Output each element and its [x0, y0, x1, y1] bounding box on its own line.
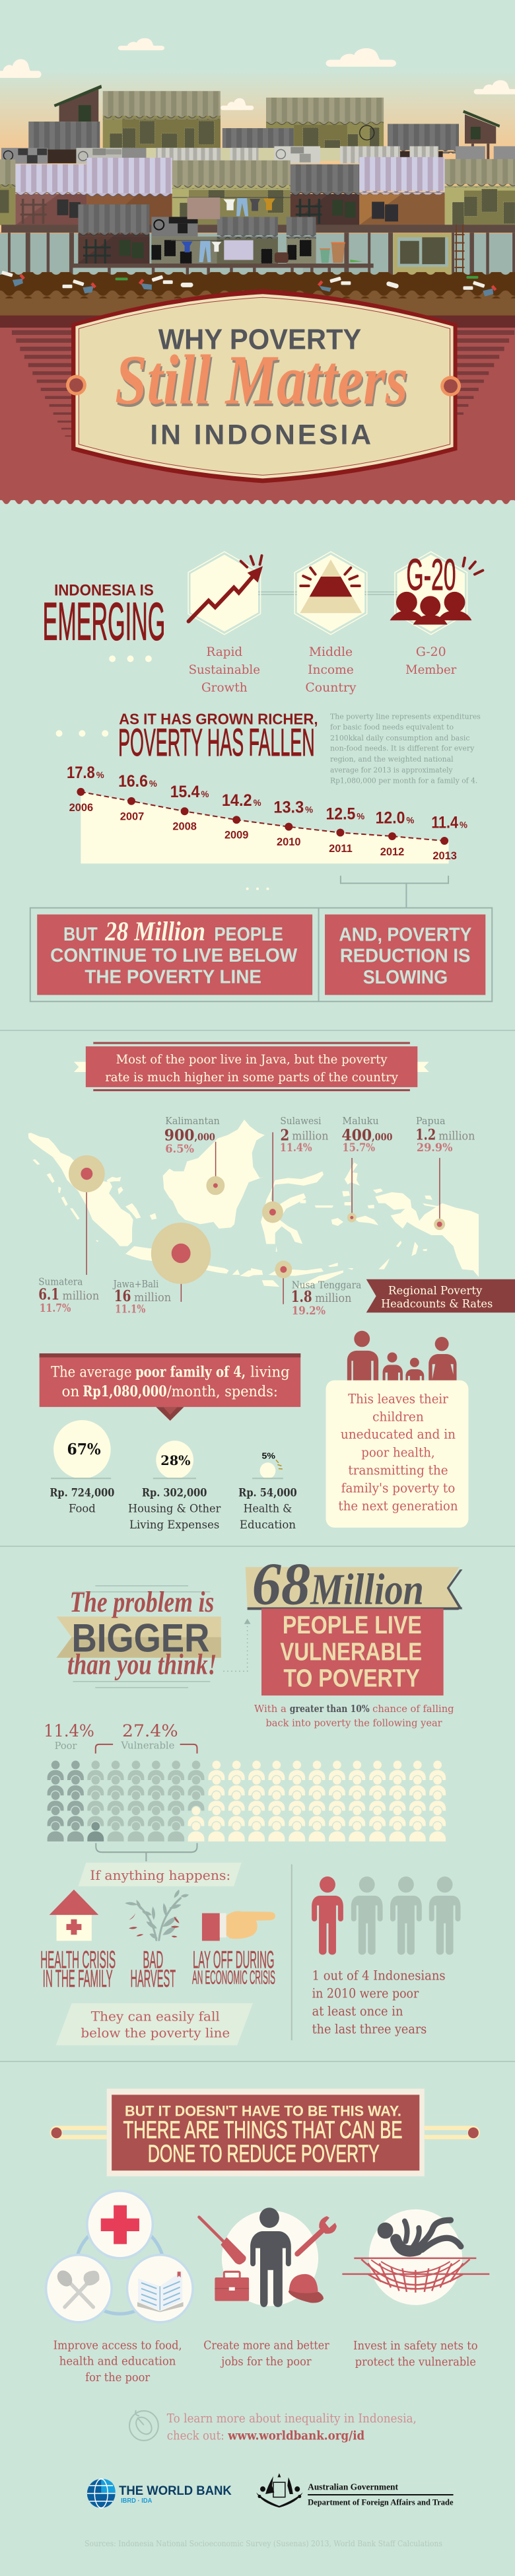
label: bad harvest: [131, 1946, 176, 1992]
legend ribbon: regional poverty headcounts and rates: [366, 1279, 515, 1312]
callout: 28 million people: [37, 914, 312, 995]
ladder: [455, 225, 464, 274]
callout: 28 million people: CONTINUE TO LIVE BELOW: [50, 945, 298, 966]
bracket over vulnerable: [96, 1744, 197, 1754]
icon: globe: [87, 2479, 116, 2508]
section: header illustration and title: [0, 0, 515, 515]
text: poverty line definition: 2100kkal daily consumption and basic: [330, 733, 469, 742]
text: poverty line definition: region, and the weighted national: [330, 754, 454, 764]
ribbon heading: rate is much higher in some parts of the country: [105, 1071, 399, 1085]
ribbon heading: [74, 1042, 429, 1091]
map marker: sulawesi: [262, 1132, 283, 1223]
callout: consequences for children: [326, 1380, 468, 1528]
label: improve access: [53, 2339, 182, 2384]
icon group: safety net: [342, 2209, 489, 2305]
map marker: maluku: [347, 1158, 357, 1223]
stat: nusa tenggara: Nusa Tenggara: [292, 1279, 361, 1291]
section: the problem is bigger: AN ECONOMIC CRISIS: [192, 1966, 275, 1988]
decorative dots: [56, 730, 108, 736]
chart percent signs: %: [254, 798, 261, 808]
callout: people live vulnerable to poverty: TO POVERTY: [283, 1664, 420, 1692]
sky background: [0, 0, 515, 329]
section: the problem is bigger: [40, 1552, 462, 2046]
chart years: [69, 802, 457, 862]
stat: kalimantan: [164, 1115, 220, 1155]
laundry on line: [171, 197, 291, 262]
stat: maluku: 15.7%: [342, 1141, 375, 1154]
chart percent signs: %: [149, 779, 157, 789]
stat: maluku: ,000: [372, 1131, 393, 1143]
text: poverty line definition: [330, 711, 481, 785]
chart values: 13.3: [273, 799, 304, 817]
ribbon: 68 million: Million: [310, 1566, 424, 1614]
logo: the world bank: [87, 2479, 232, 2508]
title banner: [66, 289, 461, 483]
label: food spending: [50, 1486, 114, 1515]
icon: computer mouse: [129, 2410, 158, 2441]
stat: kalimantan: 6.5%: [165, 1142, 194, 1155]
chart years: 2007: [120, 811, 144, 823]
label: create jobs: Create more and better: [203, 2339, 329, 2353]
label: bad harvest: BAD: [143, 1946, 163, 1974]
map of indonesia: western islands: [28, 1120, 265, 1277]
label: rapid sustainable growth: Growth: [201, 680, 248, 695]
chart values: 15.4: [170, 783, 200, 801]
label: housing spending: Living Expenses: [129, 1519, 219, 1531]
map marker: nusa tenggara: [275, 1261, 292, 1304]
text: poverty line definition: The poverty line represents expenditures: [330, 711, 481, 721]
chart values: 12.0: [376, 809, 405, 828]
stat: maluku: [341, 1115, 393, 1154]
section: indonesia is emerging and poverty trend: [30, 551, 492, 1001]
label: health crisis in the family: [40, 1946, 116, 1992]
icon: g-20 member: [390, 551, 483, 635]
callout: people live vulnerable to poverty: [261, 1608, 444, 1696]
stat: papua: million: [438, 1129, 475, 1143]
stat: nusa tenggara: 1.8: [291, 1288, 312, 1306]
label: g-20 member: [405, 645, 457, 677]
logo: the world bank: THE WORLD BANK: [119, 2484, 232, 2498]
icon: middle income pyramid: [294, 552, 367, 635]
heading: the problem is bigger than you think: [57, 1585, 221, 1688]
icon: briefcase: [215, 2272, 249, 2301]
chart years: 2011: [329, 843, 353, 855]
chart percent signs: %: [96, 770, 104, 780]
dark red top edge: [0, 316, 515, 328]
text: 1 out of 4 indonesians: the last three years: [312, 2021, 427, 2037]
stat: papua: 1.2: [415, 1126, 436, 1144]
stat: 11.4% poor: 11.4%: [44, 1721, 94, 1740]
chart percent signs: %: [201, 789, 209, 799]
map marker: kalimantan: [206, 1142, 224, 1195]
banner: there are things that can be done: THERE ARE THINGS THAT CAN BE: [123, 2116, 402, 2143]
icon: worker: [250, 2207, 291, 2307]
stat: sumatera: [38, 1275, 99, 1314]
section: the problem is bigger: IN THE FAMILY: [43, 1965, 113, 1992]
title: why poverty: WHY POVERTY: [158, 323, 361, 355]
tag: if anything happens: If anything happens:: [90, 1868, 230, 1883]
tag: they can easily fall: [56, 2003, 253, 2046]
section: the problem is bigger: HARVEST: [131, 1965, 176, 1992]
callout: reduction slowing: [325, 914, 485, 995]
bubble: housing 28%: 28%: [160, 1453, 191, 1468]
stat: sulawesi: [280, 1115, 329, 1154]
logo: australian government: Department of Foreign Affairs and Trade: [308, 2497, 454, 2507]
bracket under vulnerable: [96, 1843, 197, 1861]
stat: 27.4% vulnerable: 27.4%: [122, 1721, 178, 1740]
label: g-20 member: G-20: [416, 645, 446, 659]
label: improve access: Improve access to food,: [53, 2339, 182, 2353]
callout: consequences for children: This leaves their: [348, 1391, 449, 1407]
text: learn more: check out:: [167, 2429, 224, 2443]
callout: reduction slowing: AND, POVERTY: [339, 924, 471, 945]
icon: g-20 member: G-20: [406, 551, 456, 600]
callout: people live vulnerable to poverty: VULNERABLE: [280, 1637, 422, 1665]
stat: sumatera: million: [63, 1289, 99, 1303]
icon: family: [347, 1331, 457, 1381]
ribbon: 68 million: 68: [252, 1552, 310, 1618]
stat: jawa and bali: 11.1%: [115, 1303, 146, 1316]
label: middle income country: Middle: [309, 645, 353, 659]
callout: consequences for children: the next generation: [338, 1499, 458, 1514]
stat: 27.4% vulnerable: [120, 1721, 178, 1752]
icon: screwdriver: [199, 2217, 246, 2264]
stat: sumatera: 6.1: [38, 1285, 59, 1303]
callout: consequences for children: transmitting the: [348, 1462, 448, 1478]
legend ribbon: regional poverty headcounts and rates: Headcounts & Rates: [381, 1297, 493, 1310]
spending heading box: /month, spends:: [167, 1384, 278, 1400]
icon: house with medical cross: [50, 1890, 98, 1941]
label: lay off during an economic crisis: [192, 1946, 275, 1988]
tag: they can easily fall: below the poverty line: [81, 2025, 230, 2040]
spending heading box: living: [250, 1364, 290, 1381]
text: greater than 10% chance: With a: [254, 1703, 287, 1715]
spending heading box: poor family of 4,: [135, 1364, 246, 1381]
callout: 28 million people: BUT: [63, 924, 98, 945]
text: greater than 10% chance: greater than 10%: [290, 1703, 370, 1715]
callout: consequences for children: children: [372, 1409, 424, 1425]
lower deck water and posts: [73, 268, 331, 276]
stat: jawa and bali: million: [134, 1291, 171, 1305]
chart years: 2013: [432, 850, 457, 862]
stat: kalimantan: 900: [164, 1126, 195, 1145]
label: create jobs: jobs for the poor: [220, 2355, 312, 2369]
bubble: health and education 5%: [252, 1452, 283, 1479]
text: greater than 10% chance: back into poverty the following year: [265, 1717, 442, 1729]
connector bolts: [50, 2126, 480, 2139]
icon: spoon and fork: [46, 2255, 112, 2322]
stat: kalimantan: Kalimantan: [165, 1115, 220, 1127]
ribbon: 68 million: [246, 1552, 462, 1618]
stat: sulawesi: Sulawesi: [280, 1115, 322, 1127]
chart years: 2006: [69, 802, 93, 814]
chart values: 12.5: [326, 805, 355, 824]
heading: the problem is bigger than you think: The problem is: [69, 1585, 214, 1618]
text: 1 out of 4 indonesians: at least once in: [312, 2003, 403, 2019]
clouds: [0, 38, 515, 110]
section divider: [0, 2061, 515, 2062]
legend ribbon: regional poverty headcounts and rates: Regional Poverty: [388, 1285, 483, 1297]
stat: sulawesi: million: [292, 1129, 329, 1143]
callout: consequences for children: poor health,: [361, 1445, 435, 1460]
text: learn more: [167, 2412, 417, 2443]
text: poverty line definition: for basic food needs equivalent to: [330, 722, 454, 731]
map marker: papua: [434, 1158, 445, 1230]
icon: hard hat: [289, 2274, 324, 2303]
label: health spending: Health &: [244, 1502, 292, 1515]
callout: reduction slowing: SLOWING: [363, 967, 448, 988]
label: housing spending: Rp. 302,000: [142, 1486, 207, 1499]
dotted arrow to 68 million: [223, 1619, 251, 1671]
banner: there are things that can be done: [107, 2089, 425, 2176]
chart values: [67, 764, 458, 832]
icon group: food, health, education: [46, 2191, 193, 2322]
label: create jobs: [203, 2339, 329, 2369]
callout: reduction slowing: REDUCTION IS: [340, 946, 470, 967]
logo: australian government: [256, 2473, 454, 2507]
title: still matters: Still Matters: [115, 341, 408, 419]
water and stilts: [0, 225, 515, 276]
chart values: 16.6: [118, 772, 148, 791]
chart values: 17.8: [67, 764, 95, 782]
connector lines: [258, 591, 397, 595]
section divider: [0, 1546, 515, 1547]
icon: coat of arms: [256, 2473, 303, 2507]
banner: there are things that can be done: DONE TO REDUCE POVERTY: [148, 2140, 380, 2167]
stat: papua: [415, 1115, 475, 1154]
stat: maluku: 400: [341, 1126, 372, 1145]
callout: 28 million people: 28 Million: [104, 916, 205, 946]
stat: 11.4% poor: [44, 1721, 94, 1752]
callout: consequences for children: family's poverty to: [341, 1480, 455, 1496]
ribbon heading: Most of the poor live in Java, but the poverty: [116, 1053, 388, 1067]
stat: sumatera: 11.7%: [40, 1301, 71, 1314]
section: things that can be done: [46, 2089, 489, 2548]
buckets: [320, 242, 362, 263]
text: learn more: www.worldbank.org/id: [227, 2429, 365, 2443]
label: rapid sustainable growth: [189, 645, 260, 695]
map marker: jawa and bali: [151, 1223, 211, 1302]
banner bolt left: [66, 375, 86, 395]
spending heading box: Rp1,080,000: [83, 1384, 167, 1400]
stat: 27.4% vulnerable: Vulnerable: [120, 1740, 174, 1752]
icon: dying plant: [125, 1890, 189, 1940]
vertical divider: [291, 1865, 292, 2040]
front houses on lower deck: [73, 204, 374, 268]
patched wall: [394, 233, 452, 275]
label: g-20 member: Member: [405, 662, 457, 677]
heading: poverty has fallen: [118, 710, 318, 764]
heading: the problem is bigger than you think: than you think!: [67, 1647, 217, 1680]
icon: medical cross: [87, 2191, 153, 2258]
label: improve access: health and education: [59, 2355, 176, 2369]
stat: sumatera: Sumatera: [38, 1275, 83, 1287]
slum houses, light roofs row: [1, 146, 515, 164]
section: the problem is bigger: HEALTH CRISIS: [40, 1946, 116, 1974]
chart years: 2012: [380, 846, 404, 858]
bubble: food 67%: [51, 1420, 111, 1479]
label: housing spending: Housing & Other: [128, 1502, 221, 1515]
heading: indonesia is emerging: INDONESIA IS: [54, 581, 154, 599]
bracket: 2011-2013: [341, 876, 448, 908]
heading: poverty has fallen: AS IT HAS GROWN RICHER,: [119, 710, 318, 727]
bubble: food 67%: 67%: [67, 1441, 101, 1458]
chart years: 2010: [277, 836, 301, 848]
tag: if anything happens: [78, 1863, 242, 1886]
logo: the world bank: IBRD · IDA: [121, 2497, 152, 2505]
slum houses, back row: [28, 85, 500, 160]
icon: rapid growth arrow: [188, 552, 263, 635]
callout: consequences for children: uneducated and in: [341, 1427, 456, 1442]
label: health spending: Rp. 54,000: [238, 1486, 297, 1499]
stat: 11.4% poor: Poor: [55, 1740, 77, 1752]
icon: pointing hand: [202, 1911, 275, 1941]
chart percent signs: %: [357, 812, 364, 822]
callout: people live vulnerable to poverty: PEOPLE LIVE: [283, 1611, 422, 1639]
chart years: 2009: [224, 830, 248, 841]
heading: indonesia is emerging: [43, 581, 165, 652]
icon: open book: [127, 2255, 193, 2322]
chart: poverty rate line 2006-2013: [67, 764, 467, 863]
section divider: [0, 1030, 515, 1031]
chart values: 11.4: [431, 814, 458, 832]
slum houses, middle row: [0, 157, 515, 225]
chart: 100 people pictogram: [48, 1760, 446, 1842]
label: improve access: for the poor: [85, 2371, 151, 2384]
chart percent signs: %: [460, 820, 467, 830]
heading: the problem is bigger than you think: BIGGER: [71, 1616, 209, 1661]
stripes behind banner: [12, 330, 514, 437]
stat: sulawesi: 11.4%: [280, 1141, 312, 1154]
title: in indonesia: IN INDONESIA: [150, 419, 371, 451]
label: health spending: Education: [240, 1519, 296, 1531]
text: 1 out of 4 indonesians: 1 out of 4 Indonesians: [312, 1968, 446, 1984]
text: sources: Sources: Indonesia National Socioeconomic Survey (Susenas) 2013, World Bank Staff Calculations: [85, 2539, 442, 2548]
stat: nusa tenggara: [291, 1279, 361, 1317]
icon: falling person: [378, 2220, 461, 2251]
spending heading box: The average: [51, 1364, 131, 1381]
label: food spending: Rp. 724,000: [50, 1486, 114, 1499]
stat: nusa tenggara: million: [315, 1292, 351, 1305]
rubbish items on mud: [1, 271, 497, 297]
chart years: 2008: [172, 821, 197, 833]
label: rapid sustainable growth: Rapid: [206, 645, 242, 659]
icon: net: [342, 2258, 489, 2293]
label: middle income country: [305, 645, 357, 695]
stat: maluku: Maluku: [342, 1115, 379, 1127]
logo: australian government: Australian Government: [308, 2482, 398, 2491]
label: safety nets: [353, 2340, 478, 2369]
decorative dots: [109, 655, 152, 662]
icon: wrench: [297, 2216, 337, 2254]
text: 1 out of 4 indonesians: [312, 1968, 446, 2037]
banner bolt right: [440, 376, 461, 396]
text: poverty line definition: average for 2013 is approximately: [330, 766, 453, 775]
red lower band: [0, 328, 515, 512]
text: poverty line definition: Rp1,080,000 per month for a family of 4.: [330, 775, 477, 785]
spending heading box: [40, 1353, 300, 1421]
label: safety nets: protect the vulnerable: [355, 2355, 476, 2369]
label: housing spending: [128, 1486, 221, 1531]
bubble: health and education 5%: 5%: [262, 1452, 275, 1461]
label: rapid sustainable growth: Sustainable: [189, 662, 260, 677]
callout: 28 million people: THE POVERTY LINE: [85, 966, 261, 987]
icon: four people, one poor: [312, 1877, 460, 1955]
section: regional map and family spending: [74, 1042, 429, 1091]
scalloped bottom edge: [0, 500, 515, 515]
stat: jawa and bali: [112, 1278, 171, 1316]
section: indonesia is emerging and poverty trend: EMERGING: [43, 592, 165, 652]
section: the problem is bigger: LAY OFF DURING: [193, 1946, 274, 1974]
text: learn more: To learn more about inequality in Indonesia,: [167, 2412, 417, 2425]
text: 1 out of 4 indonesians: in 2010 were poor: [312, 1986, 419, 2001]
bubble: housing 28%: [153, 1441, 196, 1479]
callout: 28 million people: PEOPLE: [214, 924, 283, 945]
stat: jawa and bali: Jawa+Bali: [112, 1278, 158, 1290]
small dots: [246, 888, 269, 890]
text: poverty line definition: non-food needs. It is different for every: [330, 744, 475, 753]
spending heading box: on: [62, 1384, 79, 1400]
light soil band: [0, 289, 515, 317]
chart percent signs: [96, 770, 467, 830]
stat: papua: Papua: [416, 1115, 446, 1127]
stat: jawa and bali: 16: [114, 1287, 131, 1305]
callout frame: [30, 908, 492, 1001]
map of indonesia: eastern islands: [251, 1163, 479, 1288]
stat: papua: 29.9%: [417, 1141, 453, 1154]
tag: they can easily fall: They can easily fall: [91, 2009, 220, 2024]
title: still matters: Still Matters: [116, 344, 409, 422]
label: health spending: [238, 1486, 297, 1531]
banner: there are things that can be done: BUT IT DOESN'T HAVE TO BE THIS WAY.: [125, 2102, 401, 2120]
text: greater than 10% chance: [254, 1703, 454, 1729]
text: greater than 10% chance: chance of falling: [372, 1703, 454, 1715]
chart values: 14.2: [222, 791, 252, 810]
map marker: sumatera: [69, 1155, 105, 1275]
stat: sulawesi: 2: [280, 1126, 289, 1145]
icon group: jobs and tools: [199, 2207, 337, 2307]
label: middle income country: Country: [305, 680, 357, 695]
chart percent signs: %: [305, 805, 313, 815]
label: middle income country: Income: [308, 662, 354, 677]
label: food spending: Food: [69, 1502, 96, 1515]
stat: nusa tenggara: 19.2%: [292, 1304, 326, 1317]
chart percent signs: %: [406, 816, 414, 826]
dark mud with scalloped edge: [0, 272, 515, 299]
stat: kalimantan: ,000: [195, 1131, 215, 1143]
label: safety nets: Invest in safety nets to: [353, 2340, 478, 2353]
